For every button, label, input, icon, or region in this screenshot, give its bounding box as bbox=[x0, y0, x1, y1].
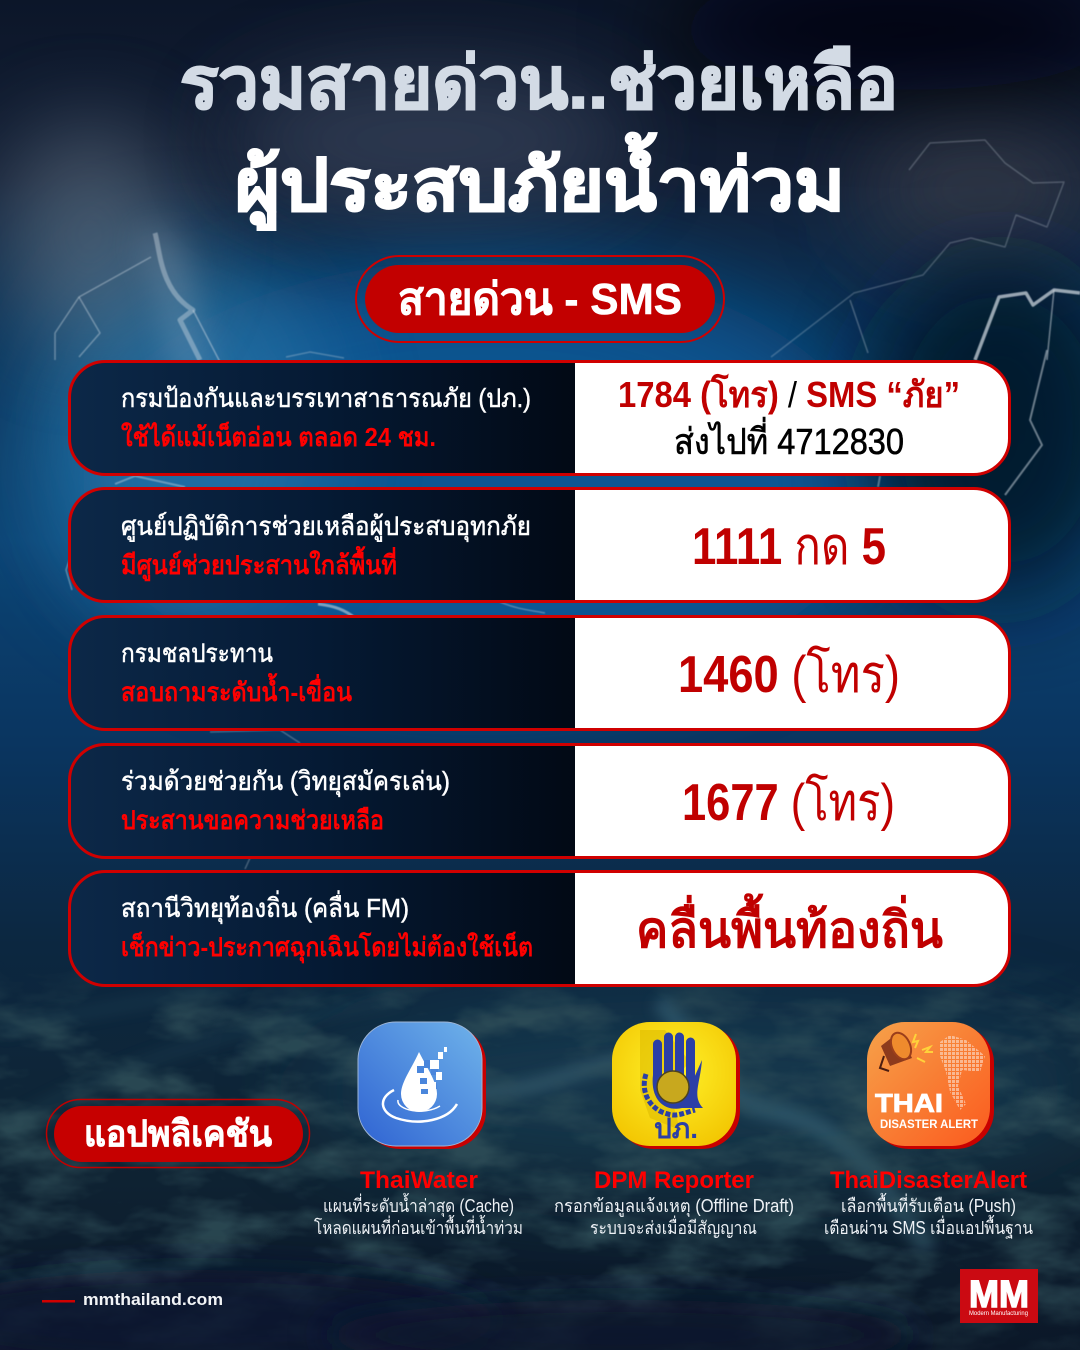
panel: row 2 flood relief centre: 1111 กด 5 bbox=[692, 518, 886, 576]
panel: row 3 irrigation department bbox=[70, 616, 1010, 730]
text block: ThaiDisasterAlert: เลือกพื้นที่รับเตือน (Push) bbox=[841, 1193, 1016, 1216]
text block: ThaiWater: แผนที่ระดับน้ำล่าสุด (Cache) bbox=[323, 1193, 514, 1217]
pill: applications heading bbox=[46, 1100, 310, 1168]
icon: ThaiDisasterAlert bbox=[867, 1022, 994, 1149]
panel: row 1 DDPM: ใช้ได้แม้เน็ตอ่อน ตลอด 24 ชม. bbox=[121, 421, 436, 452]
panel: row 5 local radio: เช็กข่าว-ประกาศฉุกเฉินโดยไม่ต้องใช้เน็ต bbox=[121, 931, 533, 964]
panel: row 4 Ruam Duay Chuay Kan bbox=[70, 744, 1010, 858]
text block: DPM Reporter: ระบบจะส่งเมื่อมีสัญญาณ bbox=[590, 1215, 757, 1238]
panel: row 5 local radio: สถานีวิทยุท้องถิ่น (คลื่น FM) bbox=[121, 890, 409, 924]
panel: row 3 irrigation department: สอบถามระดับน้ำ-เขื่อน bbox=[121, 672, 352, 707]
pill: applications heading: แอปพลิเคชัน bbox=[84, 1113, 272, 1154]
pill: hotline heading bbox=[356, 256, 724, 342]
panel: row 4 Ruam Duay Chuay Kan: ร่วมด้วยช่วยกัน (วิทยุสมัครเล่น) bbox=[121, 766, 450, 797]
logo: Modern Manufacturing bbox=[960, 1269, 1038, 1323]
panel: row 1 DDPM: 1784 (โทร) / SMS “ภัย” bbox=[618, 373, 960, 415]
text block: ThaiDisasterAlert: ThaiDisasterAlert bbox=[830, 1167, 1027, 1194]
text block: ThaiDisasterAlert: เตือนผ่าน SMS เมื่อแอปพื้นฐาน bbox=[824, 1215, 1033, 1239]
text block: ThaiWater: ThaiWater bbox=[360, 1167, 478, 1194]
text block: DPM Reporter: กรอกข้อมูลแจ้งเหตุ (Offline Draft) bbox=[554, 1196, 794, 1217]
decorative lightning bbox=[55, 140, 1080, 869]
panel: row 2 flood relief centre: มีศูนย์ช่วยประสานใกล้พื้นที่ bbox=[121, 545, 397, 582]
icon: ThaiDisasterAlert: DISASTER ALERT bbox=[880, 1117, 979, 1131]
panel: row 1 DDPM: กรมป้องกันและบรรเทาสาธารณภัย (ปภ.) bbox=[121, 383, 531, 413]
panel: row 3 irrigation department: 1460 (โทร) bbox=[678, 645, 900, 704]
title line 2: ผู้ประสบภัยน้ำท่วม bbox=[235, 132, 845, 231]
panel: row 2 flood relief centre bbox=[70, 488, 1010, 602]
icon: ThaiWater bbox=[358, 1022, 486, 1149]
panel: row 5 local radio: คลื่นพื้นท้องถิ่น bbox=[636, 893, 943, 958]
text block: ThaiDisasterAlert bbox=[824, 1167, 1033, 1239]
logo: Modern Manufacturing: Modern Manufacturing bbox=[969, 1311, 1028, 1317]
text block: DPM Reporter: DPM Reporter bbox=[594, 1167, 754, 1194]
panel: row 2 flood relief centre: ศูนย์ปฏิบัติการช่วยเหลือผู้ประสบอุทกภัย bbox=[121, 511, 531, 542]
title line 1: รวมสายด่วน..ช่วยเหลือ bbox=[180, 44, 898, 124]
panel: row 4 Ruam Duay Chuay Kan: 1677 (โทร) bbox=[682, 773, 895, 832]
footer: website: mmthailand.com bbox=[83, 1290, 223, 1309]
panel: row 5 local radio bbox=[70, 872, 1010, 986]
panel: row 1 DDPM bbox=[70, 362, 1010, 474]
panel: row 4 Ruam Duay Chuay Kan: ประสานขอความช่วยเหลือ bbox=[121, 805, 384, 835]
icon: DPM Reporter bbox=[612, 1022, 740, 1149]
text block: ThaiWater bbox=[314, 1167, 523, 1238]
icon: ThaiDisasterAlert: THAI bbox=[875, 1088, 943, 1118]
panel: row 3 irrigation department: กรมชลประทาน bbox=[121, 638, 273, 668]
icon: DPM Reporter: ปภ. bbox=[654, 1113, 698, 1144]
title bbox=[180, 44, 898, 231]
pill: hotline heading: สายด่วน - SMS bbox=[398, 275, 682, 324]
panel: row 1 DDPM: ส่งไปที่ 4712830 bbox=[674, 417, 904, 462]
text block: ThaiWater: โหลดแผนที่ก่อนเข้าพื้นที่น้ำท่วม bbox=[314, 1215, 523, 1238]
logo: Modern Manufacturing: MM bbox=[969, 1274, 1029, 1316]
text block: DPM Reporter bbox=[554, 1167, 794, 1238]
